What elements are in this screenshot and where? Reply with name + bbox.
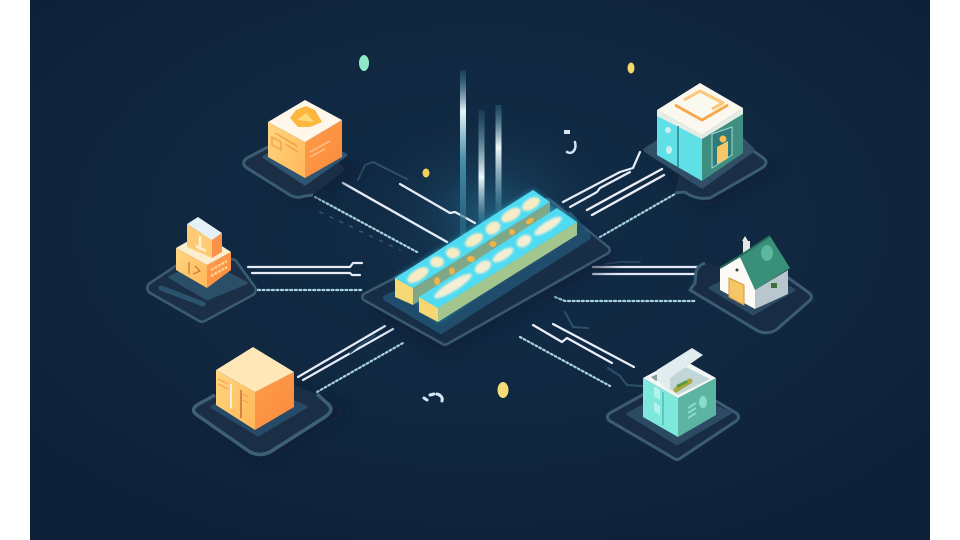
cube bbox=[268, 100, 342, 178]
glyph mark: upper right bbox=[564, 130, 575, 153]
connector: bottom-right node bbox=[520, 312, 642, 386]
bar 2 bbox=[419, 208, 577, 322]
hub platform bbox=[366, 203, 608, 348]
platform bbox=[612, 382, 734, 455]
platform bbox=[646, 138, 781, 209]
beam 1 bbox=[460, 70, 466, 235]
platform bbox=[244, 135, 366, 207]
lower box bbox=[176, 233, 231, 288]
platform bbox=[690, 263, 812, 333]
hub glow bbox=[395, 190, 577, 322]
cube bbox=[216, 347, 294, 430]
floating particles bbox=[359, 55, 634, 401]
particle: yellow top right bbox=[628, 62, 634, 74]
upper box bbox=[187, 217, 222, 258]
node: left stacked boxes bbox=[153, 217, 250, 316]
chimney bbox=[742, 236, 750, 262]
connector: left node bbox=[248, 263, 362, 290]
roof bbox=[720, 236, 790, 290]
connector: right node bbox=[555, 262, 705, 301]
node: top-right teal building bbox=[646, 83, 781, 209]
bar 1 bbox=[395, 190, 550, 305]
connectors: all network lines bbox=[248, 152, 705, 392]
central glow bbox=[370, 115, 610, 315]
house body bbox=[720, 257, 788, 309]
particle: yellow bottom bbox=[498, 382, 508, 398]
left margin bbox=[0, 0, 30, 540]
particle: teal pill bbox=[359, 55, 369, 71]
beam 2 bbox=[478, 110, 484, 222]
box bbox=[643, 348, 716, 437]
node: right house bbox=[690, 236, 812, 333]
platform bbox=[194, 374, 351, 464]
right margin bbox=[930, 0, 960, 540]
particle: yellow center bbox=[422, 168, 430, 178]
building bbox=[657, 83, 743, 181]
beam 3 bbox=[496, 105, 502, 211]
node: bottom-right open teal box bbox=[612, 348, 734, 455]
connector: top-left node bbox=[315, 162, 475, 252]
node: top-left orange cube bbox=[244, 100, 366, 207]
connector: top-right node bbox=[563, 152, 675, 237]
amber studs bbox=[434, 216, 535, 285]
central hub bbox=[366, 190, 608, 348]
platform bbox=[153, 262, 250, 316]
node: bottom-left orange cube bbox=[194, 347, 351, 464]
connector: bottom-left node bbox=[298, 326, 403, 392]
light beams bbox=[460, 70, 502, 235]
glyph mark: lower center bbox=[424, 394, 442, 401]
